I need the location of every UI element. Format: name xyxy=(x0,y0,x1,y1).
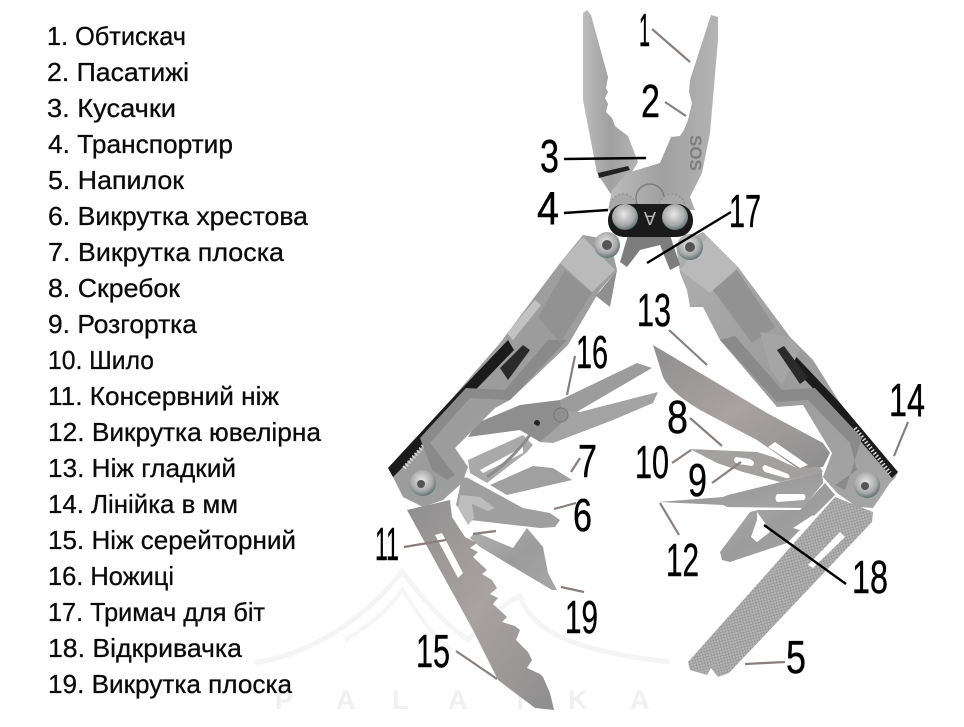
callout lines xyxy=(404,29,908,679)
legend list: 1. Обтискач xyxy=(47,21,186,51)
legend list: 11. Консервний ніж xyxy=(48,381,280,411)
legend list: 14. Лінійка в мм xyxy=(48,489,238,519)
callout numbers: 15 xyxy=(416,625,450,677)
smooth knife xyxy=(653,345,830,468)
scraper tool xyxy=(690,449,823,482)
legend list: 10. Шило xyxy=(48,345,154,375)
callout numbers xyxy=(375,4,925,683)
legend list: 12. Викрутка ювелірна xyxy=(48,417,322,447)
flat screwdriver 19 xyxy=(470,528,557,590)
callout numbers: 13 xyxy=(637,284,671,336)
right plier jaw with head xyxy=(608,15,718,220)
watermark: A xyxy=(448,685,468,715)
legend list: 3. Кусачки xyxy=(47,93,176,123)
bottle opener tool xyxy=(720,483,835,562)
watermark: K xyxy=(568,685,588,715)
right plier jaw with head: SOS xyxy=(686,135,705,171)
legend list: 7. Викрутка плоска xyxy=(48,237,285,267)
left plier jaw xyxy=(583,10,638,196)
file tool xyxy=(688,497,873,677)
callout numbers: 9 xyxy=(688,454,707,506)
pivot clip with bolts: A xyxy=(644,208,656,228)
multitool illustration xyxy=(388,10,898,710)
watermark: A xyxy=(336,685,356,715)
pivot clip with bolts xyxy=(608,204,693,237)
watermark: L xyxy=(392,685,408,715)
legend list: 16. Ножиці xyxy=(48,561,174,591)
legend list xyxy=(47,21,322,699)
legend list: 5. Напилок xyxy=(48,165,185,195)
phillips screwdriver xyxy=(456,477,560,528)
legend list: 19. Викрутка плоска xyxy=(48,669,293,699)
legend list: 6. Викрутка хрестова xyxy=(48,201,309,231)
callout numbers: 17 xyxy=(729,185,761,237)
flat screwdriver 7 xyxy=(490,466,572,495)
callout numbers: 8 xyxy=(667,391,688,443)
callout numbers: 2 xyxy=(641,75,660,127)
serrated knife xyxy=(407,500,554,710)
legend list: 4. Транспортир xyxy=(48,129,233,159)
left handle xyxy=(388,232,620,507)
callout numbers: 12 xyxy=(666,534,699,586)
callout numbers: 16 xyxy=(576,326,608,378)
bit holder xyxy=(620,235,680,270)
callout numbers: 10 xyxy=(635,436,669,488)
legend list: 17. Тримач для біт xyxy=(48,597,265,627)
legend list: 9. Розгортка xyxy=(48,309,198,339)
watermark: A xyxy=(630,685,650,715)
right handle xyxy=(676,232,898,508)
watermark: P xyxy=(275,685,293,715)
legend list: 18. Відкривачка xyxy=(48,633,243,663)
callout numbers: 3 xyxy=(540,130,559,182)
black callout lines xyxy=(564,158,846,584)
legend list: 13. Ніж гладкий xyxy=(48,453,236,483)
callout numbers: 19 xyxy=(565,591,598,643)
callout numbers: 11 xyxy=(375,518,399,570)
legend list: 8. Скребок xyxy=(48,273,181,303)
legend list: 2. Пасатижі xyxy=(47,57,189,87)
callout numbers: 6 xyxy=(573,489,592,541)
legend list: 15. Ніж серейторний xyxy=(48,525,296,555)
needle tool xyxy=(658,472,823,508)
callout numbers: 5 xyxy=(786,631,806,683)
callout numbers: 4 xyxy=(537,182,559,234)
callout numbers: 18 xyxy=(852,551,888,603)
watermark xyxy=(255,572,670,715)
callout numbers: 1 xyxy=(639,4,650,56)
callout numbers: 7 xyxy=(578,435,597,487)
flat blade strip xyxy=(468,425,536,483)
watermark: T xyxy=(512,685,529,715)
callout numbers: 14 xyxy=(889,374,925,426)
scissors xyxy=(468,363,658,443)
